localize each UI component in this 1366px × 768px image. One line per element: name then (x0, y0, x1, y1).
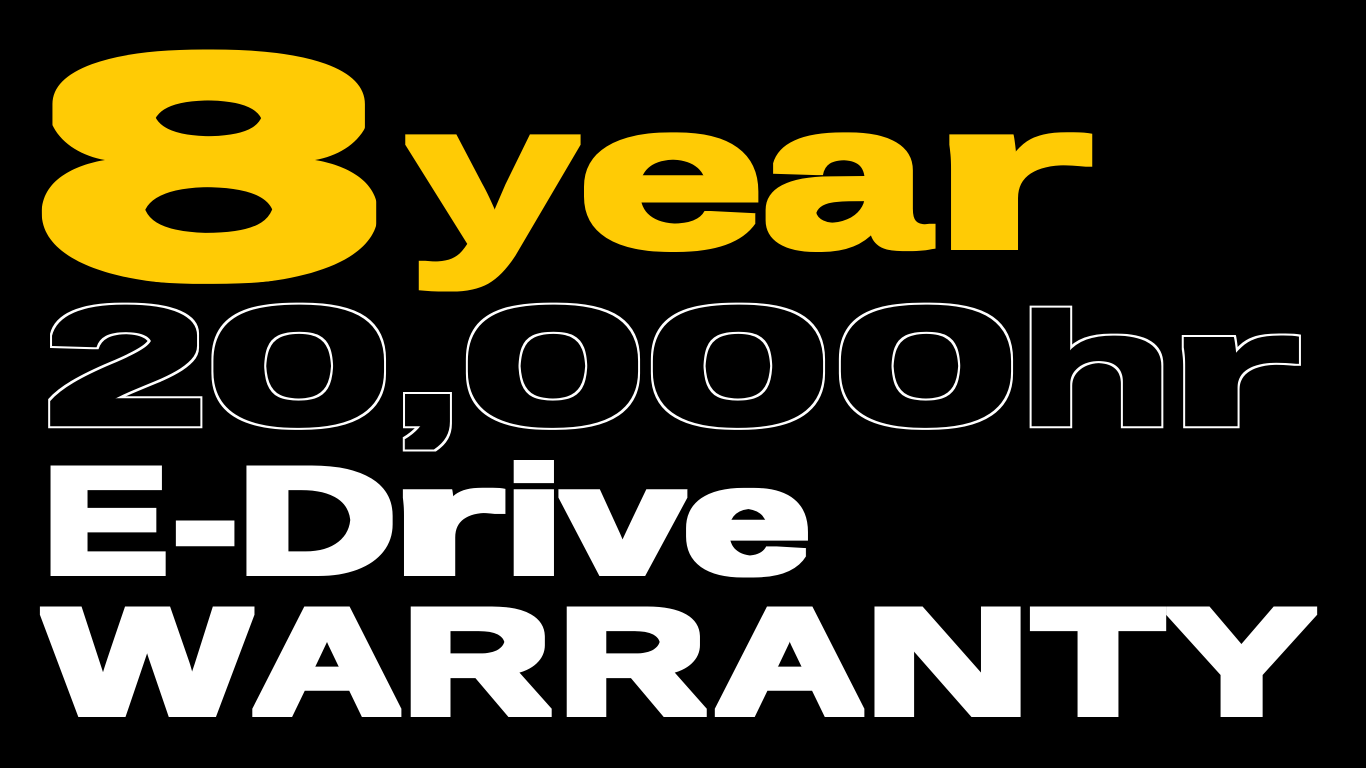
word: year: r (923, 65, 1096, 288)
big numeral 8: 8 (25, 0, 393, 334)
outlined text: 20,000hr: 0 (455, 276, 652, 455)
heading: WARRANTY: N (864, 578, 1031, 745)
outlined text: 20,000hr: 2 (40, 276, 212, 455)
word: E-Drive: r (388, 437, 505, 604)
word: year: y (406, 65, 580, 288)
word: E-Drive: v (562, 437, 684, 604)
heading: WARRANTY: A (714, 578, 865, 745)
outlined text: 20,000hr: r (1160, 285, 1304, 453)
word: E-Drive: e (682, 437, 811, 604)
heading: WARRANTY: W (45, 578, 250, 745)
word: E-Drive: i (503, 437, 565, 604)
heading: WARRANTY: Y (1167, 578, 1316, 745)
outlined text: 20,000hr: 0 (640, 276, 837, 455)
heading: WARRANTY: R (558, 578, 706, 745)
word: E-Drive: D (237, 437, 397, 604)
word: E-Drive: E (43, 437, 168, 604)
word: year: a (760, 65, 933, 288)
heading: WARRANTY: T (1032, 578, 1164, 745)
outlined text: 20,000hr: , (385, 285, 469, 453)
heading: WARRANTY: R (402, 578, 551, 745)
heading: WARRANTY: A (252, 578, 402, 745)
outlined text: 20,000hr: 0 (200, 276, 398, 455)
word: E-Drive: - (173, 437, 237, 604)
outlined text: 20,000hr: h (1014, 285, 1177, 453)
word: year: e (573, 65, 767, 288)
outlined text: 20,000hr: 0 (828, 276, 1025, 455)
